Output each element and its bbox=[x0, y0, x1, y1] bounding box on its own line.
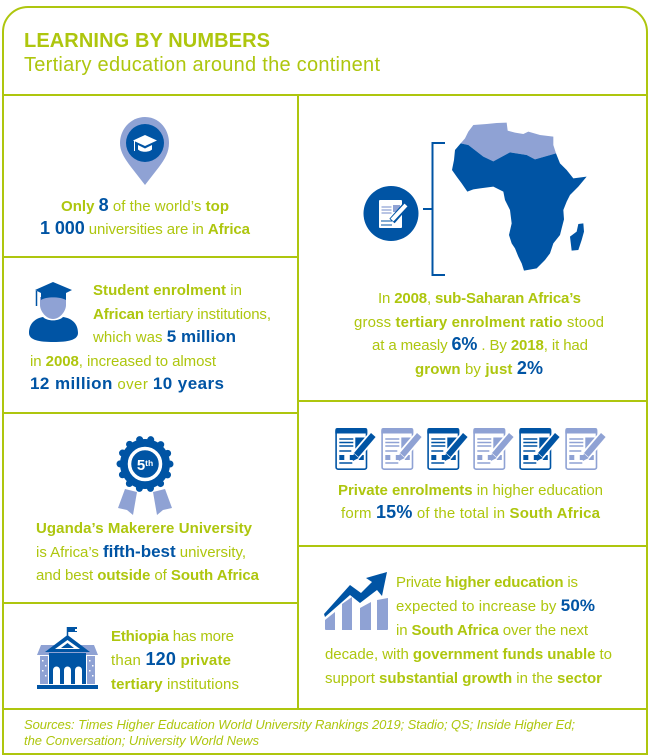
text: growth: expected to increase by 50% bbox=[396, 596, 595, 615]
panel: Makerere University bbox=[36, 439, 260, 584]
text: enrolment ratio: grown by just 2% bbox=[415, 358, 543, 378]
text: student enrolment: which was 5 million bbox=[92, 327, 236, 346]
text: student enrolment: 12 million over 10 years bbox=[30, 374, 224, 393]
icon: 5th rosette: th bbox=[145, 458, 153, 468]
text: student enrolment: African tertiary institutions, bbox=[93, 306, 271, 323]
text: enrolment ratio: at a measly 6% . By 2018, it had bbox=[372, 334, 588, 354]
text: Makerere: and best outside of South Africa bbox=[36, 567, 260, 584]
text: Ethiopia: tertiary institutions bbox=[111, 676, 239, 693]
text: only 8: Only 8 of the world’s top bbox=[61, 195, 229, 215]
sources: Sources: Times Higher Education World University Rankings 2019; Stadio; QS; Inside Higher Ed; bbox=[24, 717, 575, 732]
icon: map pin with graduation cap bbox=[120, 117, 169, 185]
panel: top 1000 universities bbox=[40, 117, 251, 238]
panel: Ethiopia bbox=[37, 627, 239, 693]
panel: sub-Saharan enrolment ratio bbox=[354, 123, 604, 378]
text: student enrolment bbox=[30, 282, 271, 393]
text: private enrolments bbox=[338, 482, 603, 522]
text: enrolment ratio: gross tertiary enrolment ratio stood bbox=[354, 314, 604, 331]
icon: 5th rosette: 5 bbox=[137, 457, 145, 474]
icon: 5th rosette bbox=[118, 439, 172, 515]
panel: student enrolment bbox=[29, 282, 271, 393]
text: growth: in South Africa over the next bbox=[396, 622, 589, 639]
icon: document in circle bbox=[364, 186, 418, 241]
title: LEARNING BY NUMBERS bbox=[24, 30, 270, 52]
text: Ethiopia bbox=[111, 628, 239, 693]
text: growth: support substantial growth in the sector bbox=[325, 670, 602, 687]
text: Makerere bbox=[36, 520, 260, 584]
text: enrolment ratio bbox=[354, 290, 604, 378]
text: growth bbox=[325, 574, 612, 687]
text: student enrolment: in 2008, increased to almost bbox=[30, 353, 217, 370]
text: Makerere: is Africa’s fifth-best university, bbox=[36, 542, 246, 561]
title bbox=[24, 30, 380, 76]
text: 1 000 universities: 1 000 universities are in Africa bbox=[40, 218, 251, 238]
text: enrolment ratio: In 2008, sub-Saharan Africa’s bbox=[378, 290, 581, 307]
icon: rising chart bbox=[324, 572, 388, 630]
text: growth: Private higher education is bbox=[396, 574, 578, 591]
text: private enrolments: form 15% of the total in South Africa bbox=[341, 502, 601, 522]
text: student enrolment: Student enrolment in bbox=[93, 282, 242, 299]
icon: university building bbox=[37, 627, 98, 689]
panel: private enrolments bbox=[335, 428, 603, 522]
sources: the Conversation; University World News bbox=[24, 733, 260, 748]
map: Africa bbox=[452, 123, 587, 271]
panel: private higher education growth bbox=[324, 572, 612, 687]
text: Ethiopia: Ethiopia has more bbox=[111, 628, 234, 645]
text: growth: decade, with government funds unable to bbox=[325, 646, 612, 663]
bracket bbox=[423, 143, 445, 275]
icon row: documents bbox=[335, 428, 603, 469]
icon: graduate bbox=[29, 282, 78, 342]
text: Makerere: Uganda’s Makerere University bbox=[36, 520, 253, 537]
title: Tertiary education around the continent bbox=[24, 54, 380, 76]
sources bbox=[24, 717, 575, 748]
text: Ethiopia: than 120 private bbox=[111, 649, 231, 669]
text: private enrolments: Private enrolments in higher education bbox=[338, 482, 603, 499]
